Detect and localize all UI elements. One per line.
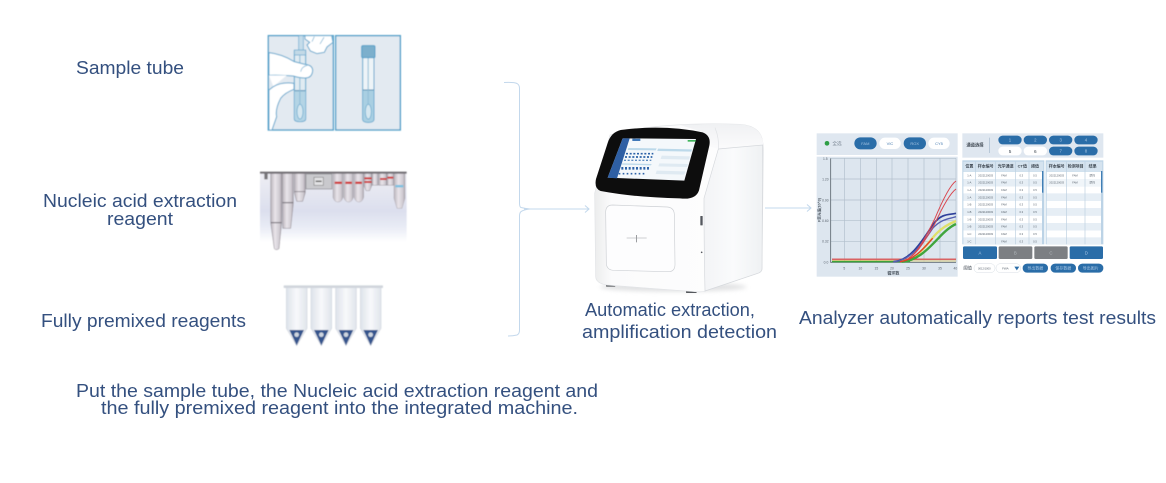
illustration: integrated analyzer machine <box>595 124 763 293</box>
label: nucleic acid extraction reagent: Nucleic acid extraction <box>43 191 237 211</box>
result data table: 检测项目 <box>1068 163 1084 169</box>
label: sample tube: Sample tube <box>76 58 184 78</box>
result data table: 阴性 <box>1090 173 1095 177</box>
arrow to the results screen <box>765 204 811 212</box>
sample data table: FAM <box>1001 195 1007 199</box>
threshold controls and export buttons: FWA <box>1002 266 1009 270</box>
channel number selector: 2 <box>1034 138 1037 143</box>
threshold controls and export buttons: 导出图片 <box>1083 265 1099 271</box>
amplification line chart: 40 <box>953 266 957 270</box>
sample data table: 1-C <box>967 239 972 243</box>
machine side panel <box>704 145 763 291</box>
sample data table: 0.5 <box>1033 188 1037 192</box>
panel: capped tube <box>336 36 400 130</box>
amplification line chart: 1.5 <box>823 157 828 161</box>
sample data table: 1-A <box>967 173 972 177</box>
channel number selector: 通道选择 <box>966 141 984 148</box>
threshold controls and export buttons: 阈值 <box>963 265 973 272</box>
bracket and arrow to the machine <box>504 82 589 336</box>
sample data table: 0.3 <box>1019 181 1024 185</box>
label: automatic extraction and amplification detection: Automatic extraction, <box>585 300 755 320</box>
group buttons A B C D: C <box>1049 251 1053 256</box>
hand holding tube <box>269 53 313 78</box>
panel: inserting swab into tube <box>268 36 333 130</box>
sample data table: 1-A <box>967 181 972 185</box>
channel selector bar: CY5 <box>935 141 944 146</box>
sample data table: 0.3 <box>1019 173 1024 177</box>
tube 2 <box>311 287 332 346</box>
result data table: 阴性 <box>1090 181 1095 185</box>
result screen: amplification curve panel <box>816 133 958 277</box>
sample data table: 0.3 <box>1019 203 1024 207</box>
label: automatic extraction and amplification detection <box>582 300 777 342</box>
group buttons A B C D: A <box>979 251 982 256</box>
label: automatic extraction and amplification detection: amplification detection <box>582 322 777 342</box>
sample data table: 0.3 <box>1019 232 1024 236</box>
sample data table: FAM <box>1001 181 1007 185</box>
sample data table: FAM <box>1001 225 1007 229</box>
amplification line chart: 15 <box>874 266 878 270</box>
illustration: nucleic acid extraction reagent cartridge <box>260 172 407 250</box>
result data table: 样本编号 <box>1049 163 1065 169</box>
sample data table: 1-B <box>967 225 972 229</box>
side port <box>700 216 703 225</box>
sample data table: 0.5 <box>1033 173 1037 177</box>
result data table: 2022120003 <box>1049 173 1065 177</box>
sample data table: 0.5 <box>1033 239 1037 243</box>
channel number selector: 8 <box>1085 149 1088 154</box>
amplification line chart: 0.0 <box>824 260 828 264</box>
amplification line chart <box>816 157 958 277</box>
sample data table: 1-B <box>967 210 972 214</box>
sample data table: 1-B <box>967 203 972 207</box>
sample data table: 阈值 <box>1031 163 1039 169</box>
sample data table: FAM <box>1001 188 1007 192</box>
instruction text: Put the sample tube, the Nucleic acid extraction reagent and <box>76 381 598 401</box>
sample data table: 0.3 <box>1019 239 1024 243</box>
sample data table: 2022120003 <box>978 188 994 192</box>
sample door <box>606 205 675 272</box>
label: nucleic acid extraction reagent: reagent <box>107 209 173 229</box>
machine top lid <box>680 124 763 149</box>
amplification line chart: F荧光值(10^3) <box>816 197 821 222</box>
channel selector bar: VIC <box>887 141 893 146</box>
result screen: data tables and controls <box>962 133 1103 273</box>
tube 1 <box>286 287 307 346</box>
fingers holding swab <box>305 36 333 54</box>
sample data table: 0.5 <box>1033 225 1037 229</box>
sample data table: 位置 <box>965 163 973 169</box>
sample data table: 2022120003 <box>978 181 994 185</box>
result data table: FAM <box>1072 173 1078 177</box>
sample data table: 2022120003 <box>978 195 994 199</box>
group buttons A B C D: D <box>1085 251 1088 256</box>
channel number selector: 3 <box>1059 138 1062 143</box>
sample data table: CT值 <box>1018 163 1027 169</box>
result data table: 结果 <box>1089 163 1097 169</box>
sample data table: 0.3 <box>1019 217 1024 221</box>
tube 4 <box>360 287 381 346</box>
sample data table: 0.5 <box>1033 203 1037 207</box>
machine feet <box>606 272 749 293</box>
channel number selector: 6 <box>1034 149 1037 154</box>
illustration: sample tube panels <box>268 36 400 130</box>
sample data table: 光学通道 <box>998 163 1014 169</box>
label: fully premixed reagents: Fully premixed reagents <box>41 311 246 331</box>
sample data table: 1-A <box>967 195 972 199</box>
machine body <box>595 124 763 292</box>
channel number selector: 7 <box>1059 149 1062 154</box>
touchscreen display <box>608 138 696 181</box>
amplification line chart: 20 <box>890 266 894 270</box>
sample data table: 0.5 <box>1033 181 1037 185</box>
sample data table: 0.3 <box>1019 188 1024 192</box>
instruction text <box>76 381 598 418</box>
sample data table: 2022120003 <box>978 217 994 221</box>
group buttons A B C D <box>963 246 1103 259</box>
touchscreen bezel <box>596 128 710 199</box>
sample data table: 样本编号 <box>978 163 994 169</box>
amplification line chart: 5 <box>843 266 845 270</box>
sample data table: 2022120003 <box>978 203 994 207</box>
sample data table: 0.5 <box>1033 195 1037 199</box>
sample data table: 2022120003 <box>978 232 994 236</box>
channel number selector: 1 <box>1009 138 1012 143</box>
illustration: four premixed reagent tubes <box>284 285 383 346</box>
sample data table: 2022120003 <box>978 225 994 229</box>
amplification line chart: 10 <box>858 266 862 270</box>
sample data table: 2022120003 <box>978 210 994 214</box>
sample data table: 2022120003 <box>978 173 994 177</box>
label: analyzer reports results: Analyzer automatically reports test results <box>799 308 1156 328</box>
sample data table: 1-B <box>967 217 972 221</box>
sample data table: 0.5 <box>1033 232 1037 236</box>
sample data table: FAM <box>1001 217 1007 221</box>
amplification line chart: 30 <box>922 266 926 270</box>
group buttons A B C D: B <box>1014 251 1017 256</box>
instruction text: the fully premixed reagent into the integrated machine. <box>101 398 578 418</box>
result data table: FAM <box>1072 181 1078 185</box>
sample data table: 0.5 <box>1033 217 1037 221</box>
amplification line chart: 1.20 <box>822 177 829 181</box>
sample data table: FAM <box>1001 239 1007 243</box>
result data table: 2022120003 <box>1049 181 1065 185</box>
sample data table <box>962 160 1044 244</box>
amplification line chart: 0.32 <box>822 240 829 244</box>
amplification line chart: 循环数 <box>887 270 899 276</box>
sample data table: 0.3 <box>1019 210 1024 214</box>
sample data table: 0.3 <box>1019 225 1024 229</box>
threshold controls and export buttons: 0012/1000 <box>978 266 991 270</box>
sample data table: FAM <box>1001 232 1007 236</box>
amplification line chart: 35 <box>938 266 942 270</box>
threshold controls and export buttons <box>963 264 1103 273</box>
channel selector bar: 全选 <box>832 140 842 147</box>
sample data table: 1-C <box>967 232 972 236</box>
threshold controls and export buttons: 保存数据 <box>1055 265 1071 271</box>
threshold controls and export buttons: 导出数据 <box>1027 265 1043 271</box>
channel selector bar: FAM <box>861 141 869 146</box>
sample data table: 0.3 <box>1019 195 1024 199</box>
sample data table: 0.5 <box>1033 210 1037 214</box>
sample data table: FAM <box>1001 173 1007 177</box>
tube 3 <box>336 287 356 346</box>
amplification line chart: 25 <box>906 266 910 270</box>
channel number selector: 4 <box>1085 138 1088 143</box>
channel selector bar <box>817 133 958 155</box>
amplification line chart: 0.90 <box>822 198 829 202</box>
channel number selector <box>962 133 1103 158</box>
result data table <box>1046 160 1103 244</box>
sample data table: FAM <box>1001 210 1007 214</box>
label: nucleic acid extraction reagent <box>43 191 237 229</box>
channel selector bar: ROX <box>910 141 919 146</box>
sample data table: 1-A <box>967 188 972 192</box>
channel number selector: 5 <box>1009 149 1012 154</box>
sample data table: FAM <box>1001 203 1007 207</box>
door logo <box>627 235 647 242</box>
amplification line chart: 0.60 <box>822 219 829 223</box>
